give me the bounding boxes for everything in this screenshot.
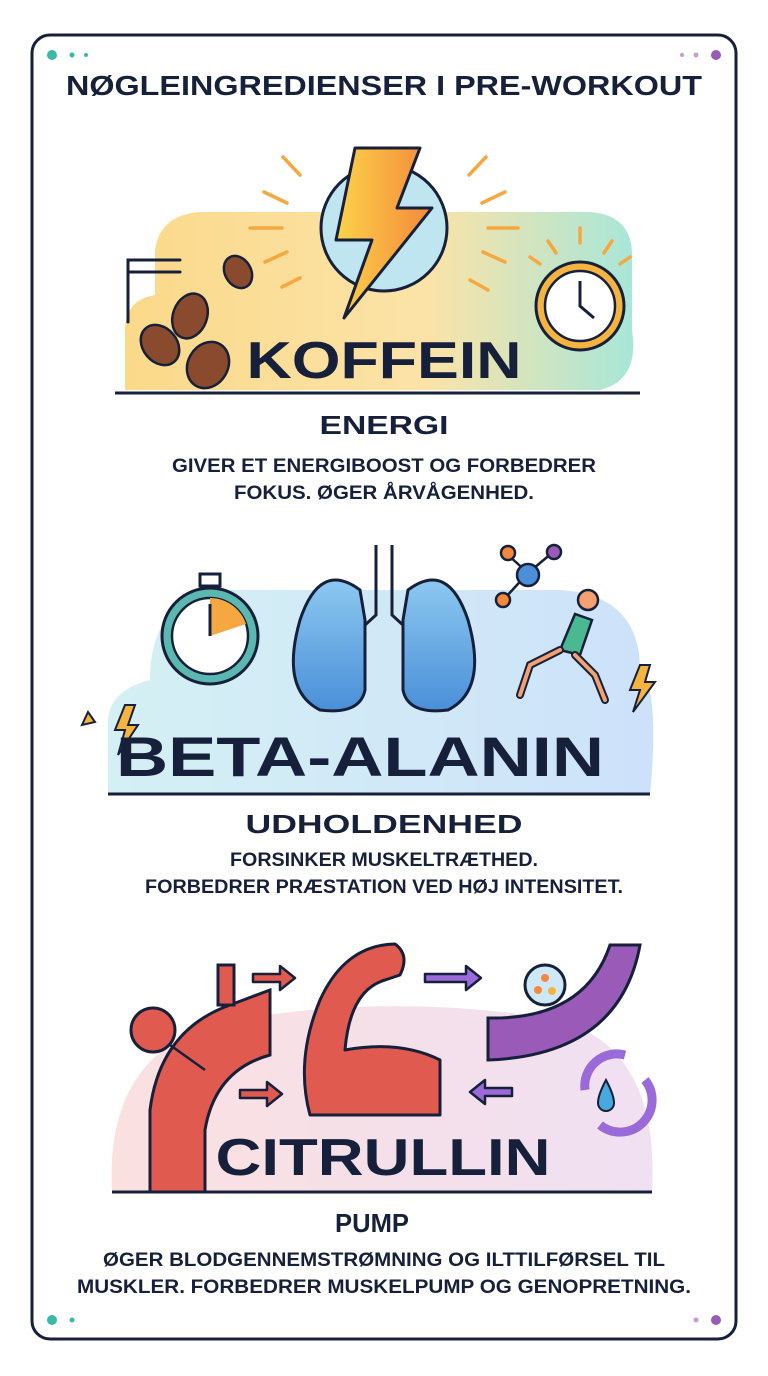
heading: CITRULLIN: CITRULLIN: [216, 1129, 550, 1187]
text: udholdenhed: UDHOLDENHED: [246, 809, 522, 839]
icon: coffee beans: [133, 251, 258, 396]
text: pump: PUMP: [335, 1208, 409, 1238]
title: NØGLEINGREDIENSER I PRE-WORKOUT: [66, 70, 702, 101]
heading: BETA-ALANIN: BETA-ALANIN: [116, 725, 604, 788]
text: pump: MUSKLER. FORBEDRER MUSKELPUMP OG GENOPRETNING.: [77, 1277, 691, 1298]
icon: clock: [530, 228, 630, 350]
text: energi: [172, 410, 596, 504]
text: pump: ØGER BLODGENNEMSTRØMNING OG ILTTILFØRSEL TIL: [103, 1250, 665, 1271]
icon: flexed arm: [304, 944, 440, 1115]
heading: KOFFEIN: KOFFEIN: [246, 332, 522, 390]
panel: beta-alanin: [82, 545, 655, 795]
icon: molecule: [496, 545, 561, 607]
icon: runner: [520, 590, 605, 700]
icon: purple vessel with cell: [488, 945, 640, 1060]
text: udholdenhed: FORBEDRER PRÆSTATION VED HØJ INTENSITET.: [145, 877, 623, 898]
text: pump: [77, 1208, 691, 1298]
lines icon: [128, 260, 180, 322]
icon: stopwatch: [162, 574, 258, 684]
text: energi: ENERGI: [320, 410, 448, 440]
rays: [250, 157, 518, 290]
icon: cycle with drop: [585, 1054, 652, 1132]
panel: citrullin: [112, 944, 653, 1192]
panel: koffein: [115, 148, 640, 396]
text: udholdenhed: [145, 809, 623, 898]
icon: lungs: [293, 545, 475, 711]
icon: blood vessel: [131, 965, 270, 1192]
arrows: [240, 966, 512, 1106]
icon: lightning bolt: [321, 148, 447, 318]
text: energi: GIVER ET ENERGIBOOST OG FORBEDRER: [172, 456, 596, 477]
text: udholdenhed: FORSINKER MUSKELTRÆTHED.: [230, 850, 538, 871]
icon: lightning small: [82, 665, 655, 755]
background blob: [125, 212, 633, 390]
text: energi: FOKUS. ØGER ÅRVÅGENHED.: [234, 483, 534, 504]
